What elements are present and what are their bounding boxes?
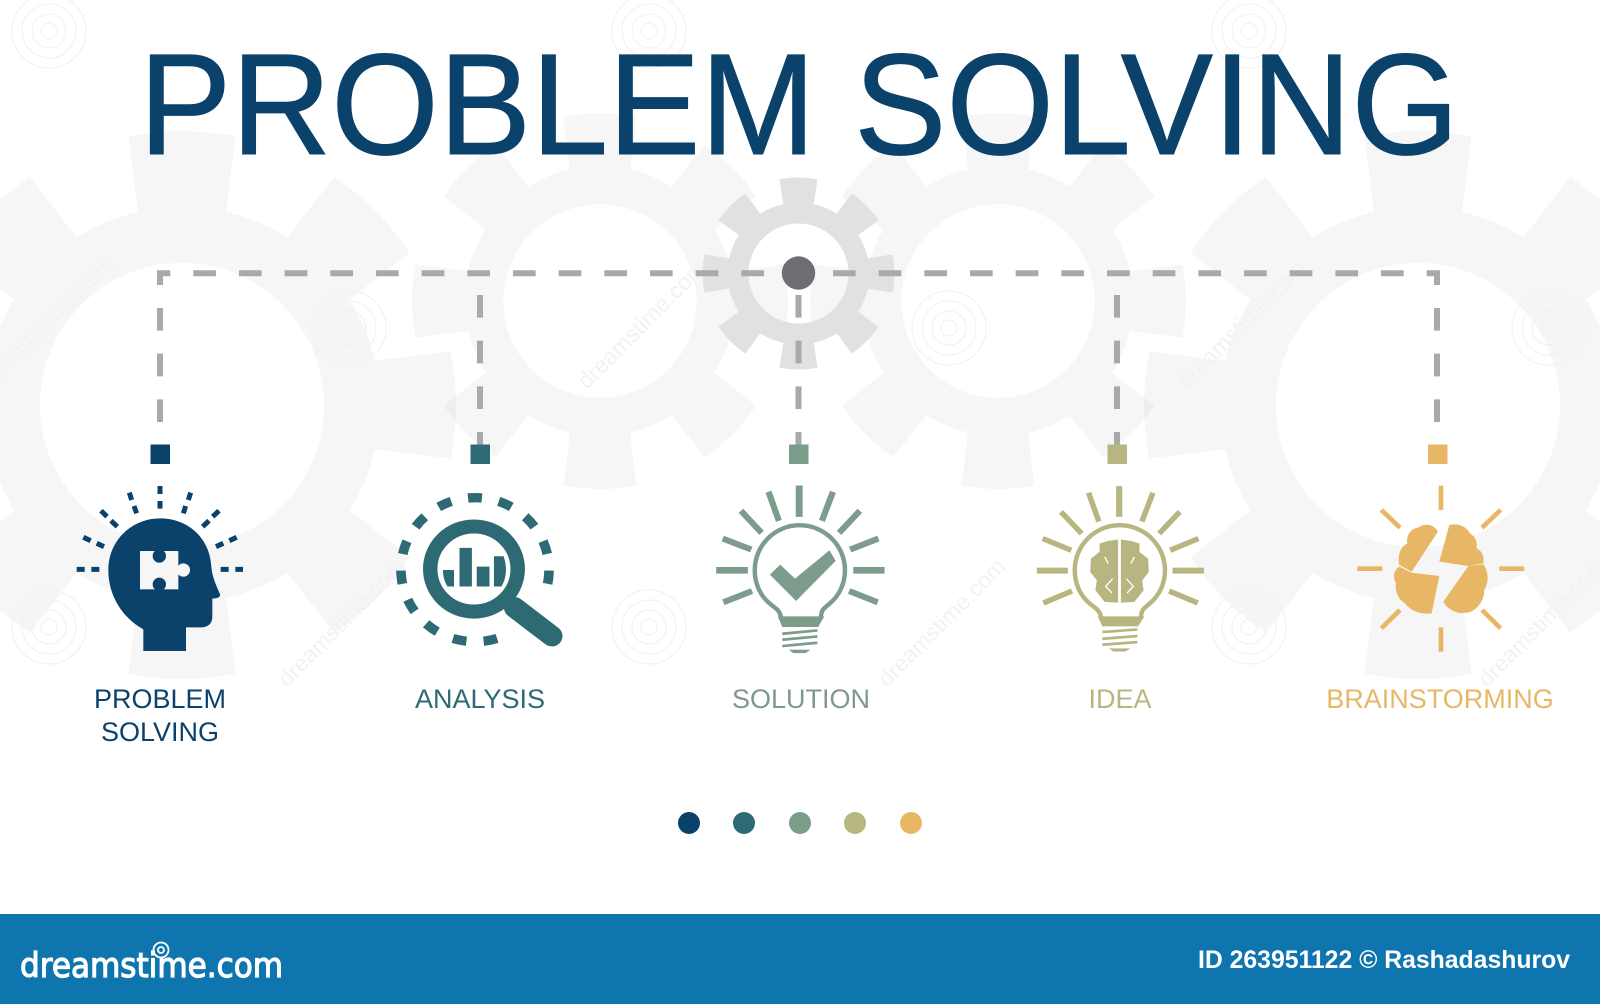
watermark text [0, 250, 1600, 692]
pagination dots [678, 812, 922, 834]
icon: brain with lightning bolt [1357, 486, 1524, 652]
icon: light bulb with brain [1037, 486, 1204, 651]
label: problem solving: SOLVING [101, 717, 219, 747]
watermark text: dreamstime.com [1172, 255, 1311, 394]
footer band [0, 914, 1600, 1004]
label: idea: IDEA [1088, 684, 1152, 714]
label: problem solving: PROBLEM [94, 684, 226, 714]
title: PROBLEM SOLVING [139, 24, 1459, 185]
icon: light bulb with check mark [716, 485, 885, 653]
watermark text: dreamstime.com [872, 553, 1011, 692]
icon: magnifying glass with bars [394, 491, 556, 648]
background gears [0, 113, 1600, 679]
watermark text: dreamstime.com [572, 255, 711, 394]
watermark spirals [12, 0, 1586, 664]
hub dot [782, 256, 815, 290]
connector squares [150, 444, 1448, 464]
footer logo spiral [154, 942, 168, 958]
label: brainstorming: BRAINSTORMING [1326, 684, 1554, 714]
dashed connector lines [157, 270, 1440, 445]
footer credit: ID 263951122 © Rashadashurov [1198, 946, 1570, 974]
icon: head with puzzle piece [77, 486, 243, 651]
watermark text: dreamstime.com [272, 553, 411, 692]
label: solution: SOLUTION [732, 684, 870, 714]
footer logo text: dreamstime.com [20, 946, 283, 986]
central gear [703, 178, 894, 369]
label: analysis: ANALYSIS [415, 684, 545, 714]
